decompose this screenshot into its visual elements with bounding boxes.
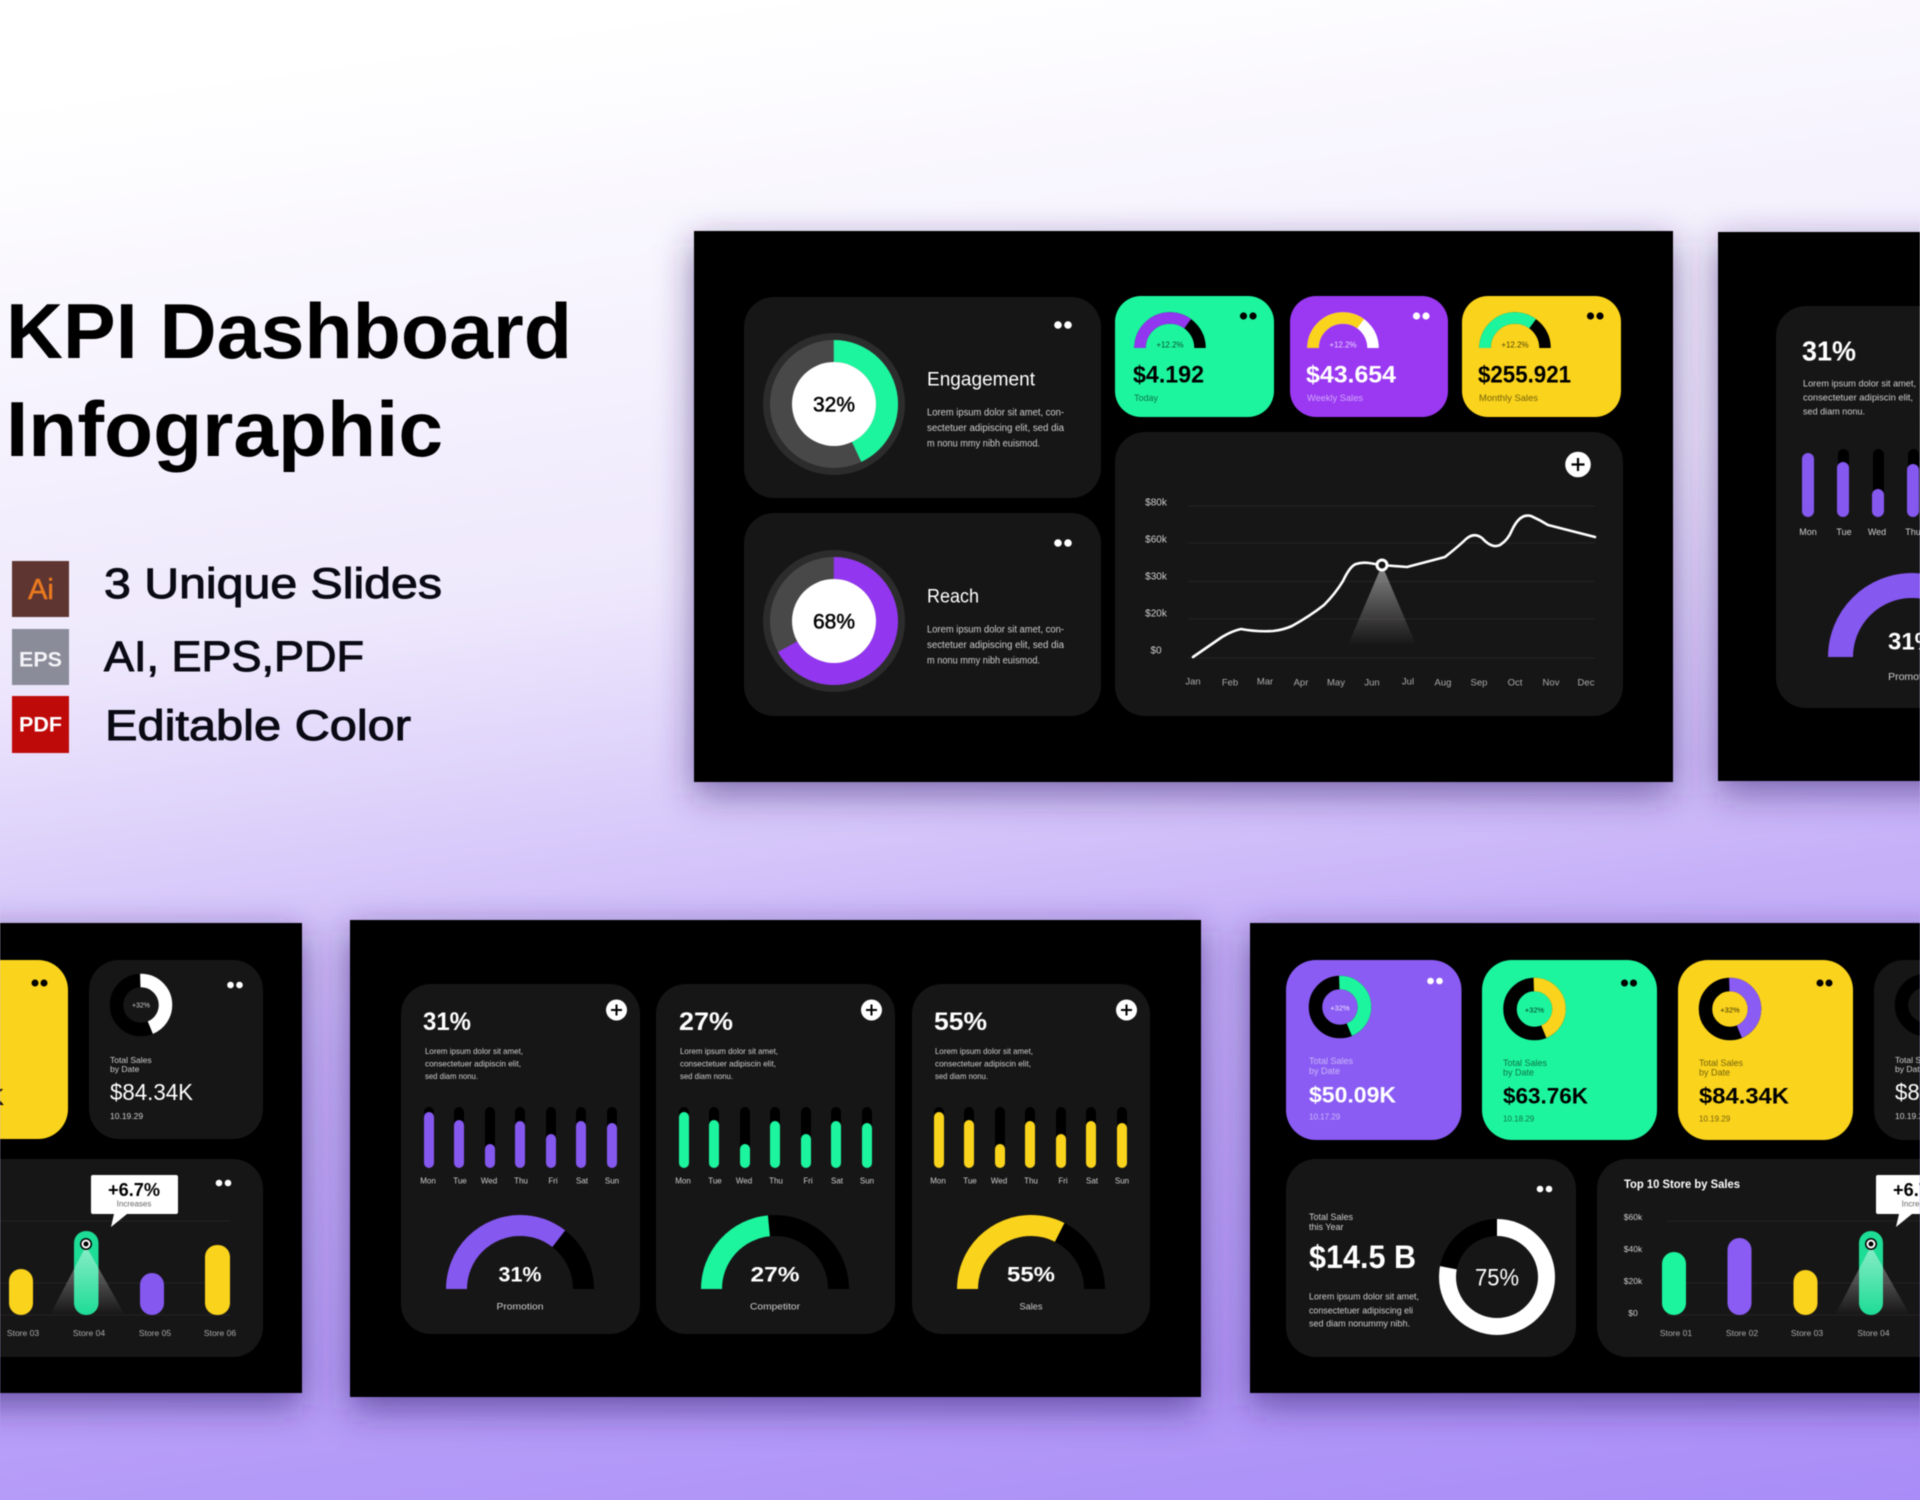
panel: promotion: 31%: [1802, 336, 1856, 366]
tile: total sales dark: [89, 960, 263, 1139]
bar chart: weekdays: Tue: [453, 1176, 467, 1186]
icon: dots menu: [1054, 539, 1072, 547]
x axis labels: [1185, 676, 1595, 688]
text: reach description: [927, 624, 1064, 666]
tile: total sales yellow: [1678, 960, 1853, 1140]
y axis labels: $60k: [1624, 1212, 1643, 1222]
bar chart: weekdays: Sun: [860, 1176, 874, 1186]
panel: reach: [744, 513, 1101, 716]
bar chart: weekdays: Fri: [548, 1176, 558, 1186]
store labels: Store 06: [204, 1328, 236, 1338]
bar chart: weekdays: [420, 1107, 619, 1186]
panel: sales 55%: 55%: [934, 1008, 987, 1036]
bar chart: weekdays: Sat: [576, 1176, 589, 1186]
tile: weekly sales: [1290, 296, 1448, 417]
tile: today: +12.2%: [1156, 340, 1184, 350]
gauge: promotion: 31%: [498, 1264, 542, 1286]
panel: promotion 31%: [401, 984, 640, 1334]
tile: total sales green: 10.18.29: [1503, 1114, 1535, 1124]
panel: total sales this year: [1286, 1159, 1576, 1357]
y axis labels: $30k: [1145, 572, 1168, 582]
store labels: Store 05: [139, 1328, 171, 1338]
donut: engagement 32%: 32%: [813, 394, 855, 416]
tile: weekly sales: Weekly Sales: [1307, 393, 1364, 403]
tile: today: Today: [1134, 393, 1159, 403]
bar chart: weekdays: Sun: [1115, 1176, 1129, 1186]
x axis labels: Apr: [1294, 678, 1308, 688]
panel: promotion 31%: 31%: [423, 1008, 471, 1036]
text: description: consectetuer adipiscin elit,: [425, 1058, 521, 1068]
tile: weekly sales: $43.654: [1306, 362, 1397, 388]
bar chart: weekdays: Fri: [1058, 1176, 1068, 1186]
x axis labels: Jul: [1402, 676, 1414, 688]
bar chart: weekdays: Sat: [1086, 1176, 1099, 1186]
x axis labels: Jun: [1364, 678, 1380, 688]
x axis labels: Feb: [1222, 678, 1238, 688]
slide: promotion (cropped at right): [1718, 232, 1920, 781]
icon: Ai file: Ai: [28, 574, 54, 606]
text: reach description: m nonu mmy nibh euismod.: [927, 656, 1040, 666]
text: engagement description: sectetuer adipiscing elit, sed dia: [927, 423, 1064, 434]
icon: Ai file: [12, 561, 69, 617]
tile: total sales dark: by Date: [110, 1064, 140, 1074]
gauge: promotion: Promotion: [496, 1302, 544, 1312]
donut: total sales: [116, 980, 166, 1030]
bar chart: weekdays: Sun: [605, 1176, 619, 1186]
x axis labels: Nov: [1543, 678, 1560, 688]
text: description: [1309, 1292, 1419, 1330]
tile: total sales purple: $50.09K: [1309, 1082, 1397, 1108]
panel: total sales this year: $14.5 B: [1309, 1239, 1416, 1275]
text: description: consectetuer adipiscin elit,: [680, 1058, 776, 1068]
tile: total sales yellow: by Date: [1699, 1068, 1730, 1078]
store labels: Store 02: [1726, 1328, 1758, 1338]
bar chart: weekdays: Mon: [420, 1176, 436, 1186]
icon: dots menu: [1054, 321, 1072, 329]
tile: total sales dark: $84.34K: [110, 1079, 194, 1105]
x axis labels: Mar: [1257, 676, 1273, 688]
text: reach description: Lorem ipsum dolor sit amet, con-: [927, 624, 1064, 636]
x axis labels: Aug: [1435, 678, 1451, 688]
icon: EPS file: EPS: [19, 648, 62, 672]
title: [6, 287, 572, 473]
bar chart: stores: [1662, 1231, 1910, 1315]
tile: total sales green: $63.76K: [1503, 1084, 1589, 1108]
text: description: Lorem ipsum dolor sit amet,: [1803, 378, 1916, 390]
icon: plus button: [606, 1000, 627, 1020]
highlight cone: [50, 1246, 125, 1315]
tile: total sales green: by Date: [1503, 1068, 1534, 1078]
panel: competitor 27%: [656, 984, 895, 1334]
text: engagement description: Lorem ipsum dolor sit amet, con-: [927, 408, 1064, 418]
icon: dots menu: [1587, 312, 1604, 320]
gauge: competitor: 27%: [750, 1264, 800, 1286]
icon: dots menu: [1413, 312, 1430, 320]
tile: monthly sales: +12.2%: [1501, 340, 1529, 350]
bar chart: weekdays: Mon: [675, 1176, 691, 1186]
donut: green tile: +32%: [1525, 1006, 1545, 1014]
panel: sales 55%: [912, 984, 1150, 1334]
text: description: consectetuer adipiscin elit,: [1803, 392, 1913, 404]
gauge: weekly sales: [1313, 318, 1373, 348]
slide: store sales: [1250, 923, 1920, 1393]
icon: plus button: [861, 1000, 882, 1020]
text: description: Lorem ipsum dolor sit amet,: [935, 1046, 1033, 1056]
tile: total sales purple: Total Sales: [1309, 1056, 1354, 1066]
bar chart: weekdays: Tue: [1836, 527, 1852, 537]
icon: dots menu: [1537, 1186, 1552, 1192]
bar chart: weekdays: Thu: [769, 1176, 783, 1186]
x axis labels: Oct: [1508, 678, 1523, 688]
store labels: [1660, 1328, 1890, 1338]
store labels: Store 03: [7, 1328, 39, 1338]
y axis labels: $40k: [1624, 1244, 1643, 1254]
donut: 75%: 75%: [1475, 1264, 1519, 1292]
icon: PDF file: PDF: [19, 714, 62, 736]
feature: Editable Color: Editable Color: [105, 702, 411, 750]
donut: purple tile: [1316, 982, 1364, 1032]
gauge: competitor: Competitor: [750, 1302, 800, 1312]
panel: top stores bar chart: [0, 1159, 263, 1357]
callout: increase: [91, 1175, 178, 1227]
tile: weekly sales: +12.2%: [1329, 340, 1357, 350]
gauge: promotion: [456, 1226, 584, 1312]
tile: total sales purple: 10.17.29: [1309, 1112, 1341, 1122]
x axis labels: Jan: [1185, 676, 1201, 688]
store labels: Store 03: [1791, 1328, 1823, 1338]
tile: total sales purple: by Date: [1309, 1066, 1340, 1076]
callout: increase: Increases: [117, 1200, 151, 1208]
donut: yellow tile: [1706, 984, 1754, 1034]
tile: total sales green: Total Sales: [1503, 1058, 1548, 1068]
bar chart: weekdays: Tue: [708, 1176, 722, 1186]
bar chart: weekdays: [1799, 449, 1920, 537]
x axis labels: May: [1327, 678, 1345, 688]
feature: 3 Unique Slides: 3 Unique Slides: [104, 560, 442, 608]
panel: total sales this year: this Year: [1309, 1222, 1344, 1232]
tile: total sales yellow: [0, 960, 68, 1139]
tile: total sales yellow: 10.19.29: [1699, 1114, 1731, 1124]
slide: store sales (left crop): [0, 923, 302, 1393]
icon: PDF file: [12, 696, 69, 753]
y axis labels: $0: [1150, 646, 1162, 656]
donut: yellow tile: +32%: [1720, 1006, 1740, 1014]
bar chart: weekdays: Sat: [831, 1176, 844, 1186]
y axis labels: $80k: [1145, 498, 1168, 508]
slide: promotion, competitor, sales: [350, 920, 1201, 1397]
panel: line chart: [1115, 432, 1623, 716]
tile: monthly sales: [1462, 296, 1621, 417]
y axis labels: [1624, 1212, 1643, 1318]
bar chart: weekdays: Tue: [963, 1176, 977, 1186]
y axis labels: $0: [1628, 1308, 1638, 1318]
tile: total sales yellow: Total Sales: [1699, 1058, 1744, 1068]
callout: increase: [1876, 1175, 1920, 1227]
feature: AI, EPS, PDF: AI, EPS,PDF: [104, 633, 364, 681]
tile: total sales yellow: $84.34K: [1699, 1084, 1790, 1108]
text: description: consectetuer adipiscin elit,: [935, 1058, 1031, 1068]
y axis labels: $20k: [1145, 608, 1168, 620]
bar chart: weekdays: [675, 1107, 874, 1186]
tile: monthly sales: $255.921: [1478, 362, 1571, 388]
text: description: [935, 1046, 1033, 1081]
icon: dots menu: [227, 982, 243, 988]
icon: dots menu: [216, 1180, 231, 1186]
tile: today: [1115, 296, 1274, 417]
slide: engagement and reach dashboard: [694, 231, 1673, 782]
gauge: sales: Sales: [1020, 1302, 1043, 1312]
y axis labels: $20k: [1624, 1276, 1643, 1286]
text: description: consectetuer adipiscing eli: [1309, 1306, 1413, 1316]
y axis labels: [1145, 498, 1168, 656]
callout: increase: +6.7%: [108, 1180, 160, 1200]
text: engagement description: [927, 408, 1064, 450]
panel: top 10 store by sales: [1597, 1159, 1920, 1357]
gauge: sales: 55%: [1007, 1264, 1055, 1286]
line: revenue trend: [1193, 516, 1595, 657]
store labels: [7, 1328, 236, 1338]
text: reach description: sectetuer adipiscing elit, sed dia: [927, 640, 1064, 651]
store labels: Store 04: [73, 1328, 105, 1338]
panel: promotion: [1776, 306, 1920, 708]
store labels: Store 04: [1857, 1328, 1890, 1338]
text: description: Lorem ipsum dolor sit amet,: [1309, 1292, 1419, 1302]
icon: dots menu: [1816, 980, 1832, 986]
icon: plus button: [1116, 1000, 1137, 1020]
text: description: sed diam nonu.: [935, 1071, 988, 1081]
text: description: Lorem ipsum dolor sit amet,: [425, 1046, 523, 1056]
heading: top 10 store: Top 10 Store by Sales: [1624, 1179, 1740, 1191]
text: description: sed diam nonummy nibh.: [1309, 1318, 1410, 1330]
text: description: sed diam nonu.: [425, 1071, 478, 1081]
y axis labels: $60k: [1145, 534, 1168, 546]
donut: reach 68%: 68%: [813, 610, 855, 634]
icon: dots menu: [1427, 978, 1443, 984]
bar chart: weekdays: Thu: [514, 1176, 528, 1186]
donut: engagement 32%: [763, 333, 905, 475]
bar chart: weekdays: Thu: [1024, 1176, 1038, 1186]
tile: total sales dark: [1874, 960, 1920, 1140]
tile: total sales green: [1482, 960, 1657, 1140]
title: KPI Dashboard: [6, 287, 572, 375]
tile: total sales dark: Total Sales: [110, 1055, 152, 1065]
heading: engagement: Engagement: [927, 370, 1036, 390]
icon: dots menu: [1621, 980, 1637, 986]
store labels: Store 01: [1660, 1328, 1692, 1338]
bar chart: weekdays: Wed: [736, 1176, 752, 1186]
text: description: sed diam nonu.: [680, 1071, 733, 1081]
x axis labels: Sep: [1471, 678, 1487, 688]
text: description: sed diam nonu.: [1803, 406, 1865, 418]
heading: reach: Reach: [927, 586, 979, 608]
text: description: Lorem ipsum dolor sit amet,: [680, 1046, 778, 1056]
bar chart: weekdays: Mon: [930, 1176, 946, 1186]
feature list: [12, 560, 442, 753]
tile: total sales dark: 10.19.29: [110, 1111, 143, 1121]
icon: dots menu: [1240, 312, 1257, 320]
bar chart: weekdays: Fri: [803, 1176, 813, 1186]
donut: purple tile: +32%: [1330, 1004, 1350, 1012]
gauge: today: [1140, 318, 1200, 348]
donut: total sales: +32%: [132, 1002, 150, 1010]
bar chart: weekdays: Wed: [991, 1176, 1007, 1186]
panel: competitor 27%: 27%: [679, 1008, 733, 1036]
bar chart: weekdays: Wed: [1868, 527, 1886, 537]
title: Infographic: [6, 385, 443, 473]
tile: today: $4.192: [1133, 362, 1204, 388]
gauge: monthly sales: [1485, 318, 1545, 348]
x axis labels: Dec: [1578, 678, 1595, 688]
donut: 75%: [1448, 1228, 1546, 1326]
gauge: sales: [968, 1226, 1094, 1312]
panel: total sales this year: Total Sales: [1309, 1212, 1354, 1222]
icon: plus button: [1565, 452, 1591, 477]
gauge: promotion: [1840, 586, 1920, 683]
text: engagement description: m nonu mmy nibh euismod.: [927, 438, 1040, 450]
tile: total sales purple: [1286, 960, 1462, 1140]
donut: reach 68%: [763, 550, 905, 692]
icon: dots menu: [32, 980, 48, 986]
bar chart: weekdays: Mon: [1799, 527, 1817, 537]
tile: monthly sales: Monthly Sales: [1479, 393, 1539, 403]
text: description: [1803, 378, 1916, 418]
icon: EPS file: [12, 629, 69, 685]
highlight cone: [1348, 565, 1416, 645]
text: description: [425, 1046, 523, 1081]
panel: engagement: [744, 297, 1101, 498]
marker: [80, 1238, 92, 1250]
bar chart: weekdays: [930, 1107, 1129, 1186]
donut: green tile: [1510, 984, 1559, 1034]
bar chart: weekdays: Wed: [481, 1176, 497, 1186]
text: description: [680, 1046, 778, 1081]
gauge: competitor: [712, 1226, 838, 1312]
marker: June: [1376, 558, 1388, 572]
